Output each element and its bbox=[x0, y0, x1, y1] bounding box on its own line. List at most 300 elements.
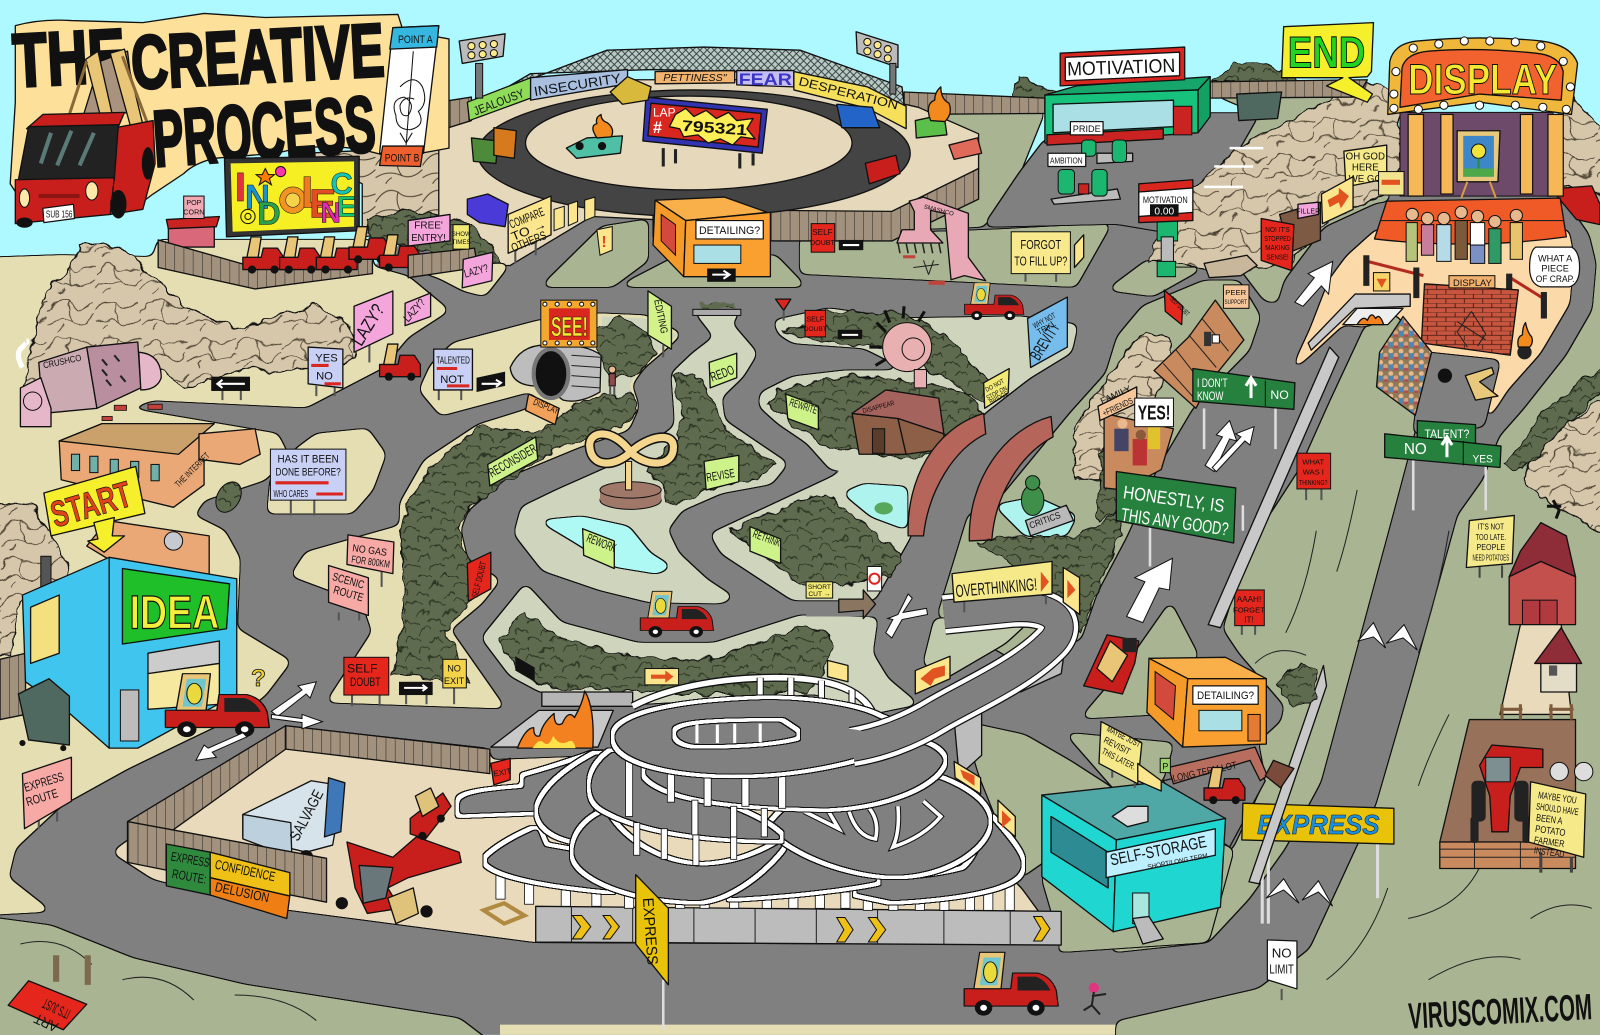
start sign bbox=[44, 466, 145, 552]
island: disappear, ponds, rethink bbox=[710, 308, 1078, 600]
potato late sign: NEED POTATOES bbox=[1472, 553, 1509, 562]
creature: critics goblin: CRITICS bbox=[1028, 510, 1062, 531]
sign: do not stop on bridge: BRIDGE bbox=[988, 390, 1010, 406]
ropes and stanchions bbox=[1363, 255, 1547, 319]
sign: it's just art, upside down: IT'S JUST bbox=[40, 995, 73, 1021]
sign: family and friends bbox=[1098, 383, 1137, 421]
motivation price sign: 0.00 bbox=[1154, 206, 1175, 217]
marquee: DISPLAY bbox=[1408, 56, 1557, 104]
pride sign: PRIDE bbox=[1073, 124, 1101, 134]
front fence of salvage yard bbox=[128, 822, 327, 902]
lower detailing right wall bbox=[1183, 679, 1266, 747]
wrecked car and fire in infield bbox=[566, 114, 622, 158]
barrier and fire pit bbox=[1308, 294, 1410, 350]
fence: top background bbox=[904, 80, 1367, 114]
truck wheels bbox=[16, 147, 154, 228]
dumpster by gas station bbox=[1237, 92, 1282, 121]
sign: editing: EDITING bbox=[651, 298, 669, 335]
sign: yes no: NO bbox=[316, 371, 333, 383]
crushco machine: CRUSHCO bbox=[42, 353, 82, 370]
truck by lazy signs bbox=[380, 344, 420, 381]
compare to others sign bbox=[507, 196, 551, 263]
arrow: big up arrow bbox=[1127, 558, 1172, 623]
sign: reconsider: RECONSIDER bbox=[486, 441, 539, 480]
barrier: highway guard upper bbox=[1208, 347, 1339, 628]
sign: yellow arrow right bbox=[645, 669, 679, 685]
truck cargo frame bbox=[69, 49, 151, 133]
lower detailing curtain bbox=[1155, 672, 1176, 720]
indolence billboard bbox=[158, 156, 372, 289]
sign: what was i thinking: THINKING? bbox=[1299, 479, 1328, 487]
sign: overthinking bbox=[952, 561, 1052, 612]
sign: overthinking: OVERTHINKING! bbox=[955, 574, 1038, 601]
free entry sign: ENTRY! bbox=[411, 233, 446, 244]
lap counter billboard: 795321 bbox=[681, 118, 748, 139]
ground: sage by self storage bbox=[963, 722, 1234, 952]
sign: do not stop on bridge: DO NOT bbox=[984, 378, 1006, 394]
storage sign: SHORT/LONG TERM bbox=[1147, 852, 1208, 872]
parking stripes bbox=[1204, 148, 1263, 187]
station front bbox=[1045, 90, 1198, 143]
ground: middle sage strip between roads bbox=[1112, 310, 1429, 952]
idea right wall bbox=[109, 557, 237, 748]
sign: has it been done before bbox=[270, 449, 346, 515]
sign: editing bbox=[648, 291, 671, 357]
sign: short cut: SHORT bbox=[808, 584, 831, 591]
sign: why not try brevity: BREVITY bbox=[1027, 319, 1064, 363]
sign: maybe just revisit bbox=[1099, 722, 1143, 788]
sign: i don't know highway bbox=[1193, 369, 1295, 449]
dark oval track bbox=[478, 90, 910, 216]
big red title truck bbox=[15, 49, 155, 228]
sign: i don't know highway: I DON'T bbox=[1197, 376, 1228, 390]
top detailing arrow sign bbox=[707, 269, 736, 282]
arena wall bbox=[653, 169, 979, 241]
small display sign bbox=[1449, 276, 1495, 288]
sign: express route pink: ROUTE bbox=[24, 786, 60, 809]
sign: small yellow by overpass bbox=[828, 660, 848, 682]
hills: display rock face bbox=[1148, 82, 1400, 268]
sign: express route pink bbox=[22, 757, 71, 829]
sign: scenic route: ROUTE bbox=[332, 584, 365, 604]
sign: rework bbox=[583, 529, 619, 569]
sign: self doubt track: DOUBT bbox=[810, 239, 836, 247]
detailing shop top bbox=[653, 197, 770, 282]
sign: peer support bbox=[1223, 285, 1249, 308]
area inside top ramp loop bbox=[923, 619, 1032, 679]
island: see tunnel sage side bbox=[602, 316, 678, 404]
sign: end: END bbox=[1288, 27, 1365, 78]
sign: revise bbox=[704, 455, 739, 490]
sign: arrow island bbox=[838, 330, 862, 339]
station roof bbox=[1045, 77, 1210, 95]
storage left wall bbox=[1042, 795, 1116, 932]
sign: maybe just revisit: MAYBE JUST bbox=[1105, 724, 1143, 749]
top detailing window bbox=[694, 245, 741, 263]
crushco machine bbox=[18, 341, 161, 427]
sign: oh god here we go: OH GOD bbox=[1346, 151, 1385, 162]
show times sign: SHOW bbox=[452, 231, 471, 238]
island: has it been done before bbox=[267, 429, 386, 513]
overpass: top ramp bbox=[852, 607, 1059, 747]
sign: do not stop on bridge: STOP ON bbox=[985, 385, 1009, 402]
trees: far right strip bbox=[1505, 362, 1600, 472]
detailing pad bbox=[617, 255, 806, 287]
sign: honestly highway bbox=[1116, 472, 1243, 566]
sign: end bbox=[1282, 23, 1373, 102]
pump islands bbox=[1051, 153, 1133, 204]
storage steps bbox=[1133, 916, 1163, 944]
ground: sage slope under hill bbox=[1107, 260, 1204, 296]
sign: parking: P bbox=[1162, 762, 1168, 772]
sign: express route pink: EXPRESS bbox=[22, 770, 65, 795]
potato farmer sign: INSTEAD bbox=[1533, 845, 1565, 859]
storage vent bbox=[1112, 806, 1148, 827]
bench deck bbox=[1154, 300, 1244, 408]
overpass: top deck bbox=[615, 700, 918, 774]
gas station lot bbox=[984, 113, 1259, 234]
truck bed side bbox=[110, 121, 155, 214]
sign: talented not: TALENTED bbox=[436, 355, 470, 366]
potato farmer sign: MAYBE YOU bbox=[1537, 790, 1577, 806]
free entry sign: FREE' bbox=[414, 221, 443, 232]
salvage yard ground and overpass floor bbox=[112, 727, 1061, 944]
sign: aaah forget it: FORGET bbox=[1233, 605, 1265, 614]
sign: peer support: PEER bbox=[1225, 288, 1247, 297]
arrow: idea exit up right bbox=[271, 682, 316, 716]
sign: self doubt track: SELF bbox=[812, 228, 833, 237]
billboard face bbox=[231, 161, 354, 232]
sign: no limit bbox=[1267, 940, 1297, 1000]
popcorn booth bbox=[166, 196, 219, 247]
storage door bbox=[1133, 893, 1149, 924]
sage wedge by track road bbox=[541, 220, 648, 287]
sign: forgot to fill up: FORGOT bbox=[1020, 237, 1061, 252]
idea building bbox=[18, 521, 237, 751]
inner drive-in fence bbox=[408, 248, 478, 278]
ground: sage island by long term lot bbox=[1065, 733, 1173, 791]
ponds bbox=[843, 484, 1077, 536]
free entry sign bbox=[408, 214, 450, 246]
motivation sign bbox=[1060, 47, 1185, 86]
sign: forgot to fill up bbox=[1011, 232, 1070, 282]
pool bbox=[539, 516, 671, 574]
show times sign bbox=[452, 225, 471, 249]
sign: yes no: YES bbox=[315, 352, 338, 364]
express route sign on fence bbox=[166, 844, 290, 919]
ambition sign: AMBITION bbox=[1050, 156, 1083, 165]
billboard lettering: N bbox=[245, 178, 270, 216]
storage sign: SELF-STORAGE bbox=[1109, 833, 1208, 869]
billboard doodles bbox=[241, 166, 286, 224]
ground: smash machine island bbox=[800, 224, 1111, 287]
sign: has it been done before: WHO CARES bbox=[273, 489, 308, 500]
salvage truck: SALVAGE bbox=[286, 787, 327, 844]
sign: rethink: RETHINK bbox=[751, 528, 782, 550]
spiked roller bbox=[869, 306, 932, 388]
trees: rethink patch bbox=[729, 493, 900, 587]
lamp and rear building bbox=[41, 521, 209, 587]
sign: yes: YES! bbox=[1138, 403, 1170, 425]
hills: rock right of display bbox=[1551, 87, 1600, 194]
overpass: deck lower middle bbox=[728, 847, 881, 897]
arrow: idea exit down left bbox=[196, 733, 247, 760]
station side bbox=[1198, 77, 1210, 133]
sign: forgot to fill up: TO FILL UP? bbox=[1014, 253, 1067, 268]
ground: top sage hill beside arena bbox=[892, 102, 1045, 230]
sign: maybe just revisit: REVISIT bbox=[1102, 735, 1132, 757]
sign: arrow at display steps bbox=[1379, 172, 1404, 195]
point a to point b strip: POINT B bbox=[385, 152, 419, 164]
sign: yield triangle bbox=[776, 299, 791, 321]
arrow: fork right bbox=[1212, 427, 1254, 472]
drive-in cars in front bbox=[243, 227, 420, 274]
ground: bench island bbox=[938, 281, 1260, 663]
sign: rewrite: REWRITE bbox=[788, 397, 819, 417]
arrow: cross junction bbox=[886, 594, 928, 638]
booth: filler: FILLER bbox=[1296, 207, 1320, 215]
sign: black arrow right bbox=[477, 372, 505, 392]
idea sign: IDEA bbox=[130, 587, 219, 639]
storage right wall bbox=[1113, 819, 1226, 932]
sign: talented not bbox=[434, 349, 472, 400]
banner: jealousy: JEALOUSY bbox=[472, 86, 526, 118]
truck plate bbox=[43, 204, 74, 223]
trees: upper roller patch bbox=[784, 310, 990, 403]
title parchment bbox=[10, 13, 449, 214]
overpass: deck lowest right bbox=[854, 816, 1021, 900]
overpass lower supports bbox=[496, 873, 1014, 910]
sign: i don't know highway: NO bbox=[1270, 388, 1289, 402]
display pavilion bbox=[1388, 37, 1578, 198]
sign: no limit: NO bbox=[1272, 945, 1292, 960]
sign: arrow track bbox=[839, 240, 863, 250]
sign: parking bbox=[1160, 758, 1170, 773]
small warning arrow sign bbox=[1373, 273, 1390, 291]
overpass: deck left crescent bbox=[539, 753, 601, 840]
sign: scenic route: SCENIC bbox=[331, 571, 366, 592]
title word: process: PROCESS bbox=[150, 79, 378, 183]
sign: no it's stopped making sense: NO! IT'S bbox=[1265, 225, 1290, 234]
top detailing left wall bbox=[653, 200, 686, 277]
truck front bbox=[15, 178, 114, 224]
person by the tunnel bbox=[609, 366, 616, 395]
storage window bbox=[1051, 816, 1108, 888]
banner: pettiness bbox=[655, 71, 735, 84]
sign: scenic route bbox=[329, 565, 368, 621]
marquee bbox=[1388, 37, 1578, 114]
trees and sage band below rework bbox=[482, 584, 918, 714]
top detailing roof bbox=[655, 197, 767, 221]
potato late sign bbox=[1466, 515, 1514, 578]
overpass: top deck hole bbox=[677, 723, 798, 744]
sign: redo: REDO bbox=[708, 362, 736, 385]
title word: the: THE bbox=[11, 14, 127, 104]
runner figure bbox=[1084, 983, 1106, 1014]
cannonball and debris bbox=[1438, 368, 1498, 400]
ground: sage behind gas station and rocks bbox=[1167, 87, 1390, 303]
sign: no exit: NO bbox=[447, 664, 461, 674]
truck grille bbox=[39, 194, 80, 198]
sign: what was i thinking: WHAT bbox=[1302, 457, 1325, 466]
sign: talented not: NOT bbox=[440, 374, 464, 386]
sign: talent: YES bbox=[1472, 453, 1493, 465]
sign: big orange arrow bbox=[1321, 177, 1353, 224]
point a to point b strip: POINT A bbox=[398, 34, 433, 46]
sign: do not stop on bridge bbox=[984, 369, 1010, 408]
trees: long green band bbox=[393, 393, 636, 684]
ground: far right rock bbox=[1520, 388, 1600, 541]
sign: self doubt track bbox=[810, 224, 836, 252]
ambition sign bbox=[1048, 153, 1086, 166]
compare to others sign: COMPARE bbox=[507, 205, 546, 232]
sign: aaah forget it: AAAH! bbox=[1237, 595, 1261, 604]
trucks bbox=[380, 283, 1139, 1016]
sign: black arrow left bbox=[211, 377, 250, 400]
speech bubble: what a piece of crap: PIECE bbox=[1541, 264, 1569, 274]
sign: black arrow road bbox=[399, 682, 433, 704]
barrier: highway guard lower bbox=[1249, 665, 1327, 884]
trees: rewrite patch bbox=[764, 377, 985, 459]
motivation price sign bbox=[1139, 180, 1193, 277]
road rubble by crushco bbox=[102, 404, 162, 421]
storage sign bbox=[1106, 829, 1215, 878]
sign: has it been done before: DONE BEFORE? bbox=[276, 467, 341, 479]
sign: black arrow diagonal bbox=[515, 656, 535, 682]
detailing shop lower bbox=[1147, 657, 1266, 747]
yellow arrow markers bbox=[554, 197, 612, 255]
sign: rewrite bbox=[786, 394, 819, 430]
banner: desperation bbox=[794, 72, 906, 129]
billboard lettering: L bbox=[301, 166, 328, 217]
sign: exit bbox=[491, 758, 512, 785]
billboard lettering: N bbox=[320, 198, 341, 230]
sign: self doubt large: SELF bbox=[347, 662, 378, 676]
truck climbing to detailing bbox=[1084, 635, 1139, 694]
sign: aaah forget it: IT! bbox=[1244, 616, 1254, 625]
banner: pettiness: PETTINESS" bbox=[663, 73, 727, 84]
lap counter billboard: # bbox=[653, 119, 662, 137]
lower detailing sign: DETAILING? bbox=[1197, 690, 1254, 702]
trees by compare sign bbox=[367, 209, 505, 268]
panel: race track arena bbox=[429, 32, 982, 267]
speech bubble: what a piece of crap: OF CRAP. bbox=[1536, 274, 1574, 284]
long term lot bbox=[1163, 747, 1267, 847]
dumpster bbox=[18, 679, 69, 751]
truck in idea garage foreground bbox=[165, 674, 269, 737]
brick wall bbox=[1421, 284, 1518, 355]
overpass: columns under right lobe bbox=[692, 800, 767, 837]
speech bubble: what a piece of crap bbox=[1530, 247, 1580, 287]
sign: express vertical bbox=[636, 875, 668, 1029]
truck on the bottom road bbox=[964, 952, 1058, 1016]
salvage truck bbox=[243, 778, 345, 864]
sign: why not try brevity: WHY NOT bbox=[1031, 311, 1057, 330]
arrow: to the display road bbox=[1295, 261, 1333, 306]
sign: self doubt diagonal bbox=[1164, 290, 1191, 325]
station door bbox=[1173, 106, 1192, 135]
sign: family and friends: FAMILY bbox=[1099, 383, 1133, 406]
long term lot: LONG TERM LOT bbox=[1172, 760, 1238, 785]
lower detailing door bbox=[1248, 714, 1260, 741]
lap counter billboard bbox=[643, 97, 767, 169]
ground: right sage hills bbox=[1116, 179, 1600, 1035]
sign: maybe just revisit: THIS LATER. bbox=[1100, 746, 1137, 772]
storage roof bbox=[1042, 782, 1226, 840]
wooden frame debris bbox=[484, 903, 524, 924]
sign: express banner bbox=[1242, 803, 1394, 924]
sign: short cut bbox=[806, 582, 833, 598]
billboard lettering: C bbox=[331, 167, 353, 201]
drive-in fence bbox=[158, 240, 372, 289]
ground: fence left of idea building bbox=[0, 653, 26, 720]
overpass: white frames in right deck bbox=[804, 801, 941, 847]
sign: no gas bbox=[347, 535, 394, 587]
sign: yellow turn left lower bbox=[954, 761, 981, 794]
trees by tunnel bbox=[593, 316, 655, 380]
island under lazy sign bbox=[408, 263, 510, 296]
farm path bbox=[1500, 625, 1571, 714]
display stage bbox=[1374, 198, 1566, 244]
station windows bbox=[1053, 100, 1173, 133]
scarecrow bbox=[1547, 500, 1561, 519]
sign: yellow turn left bbox=[915, 656, 950, 694]
red wreck pile bbox=[336, 837, 461, 924]
shrub by detailing bbox=[1276, 663, 1318, 709]
creature: critics goblin bbox=[1021, 476, 1073, 536]
station base bbox=[1047, 129, 1163, 145]
motivation price sign: MOTIVATION bbox=[1143, 195, 1188, 205]
sign: exit: EXIT bbox=[493, 767, 512, 779]
overpass: columns under top deck bbox=[626, 757, 786, 816]
tunnel bbox=[510, 345, 601, 401]
sign: rework: REWORK bbox=[585, 531, 619, 555]
sign: what was i thinking: WAS I bbox=[1303, 468, 1324, 477]
sign: honestly highway: HONESTLY, IS bbox=[1122, 481, 1226, 516]
banner: fear: FEAR bbox=[739, 71, 792, 89]
fuel pumps bbox=[1058, 140, 1127, 196]
overpass: exit ramp bbox=[460, 753, 601, 813]
point a to point b strip bbox=[380, 26, 439, 166]
sign: talent: NO bbox=[1404, 441, 1427, 458]
popcorn booth: POP bbox=[186, 199, 202, 207]
lap counter billboard: LAP bbox=[653, 105, 676, 119]
sign: self doubt diagonal: SELF DOUBT bbox=[1168, 295, 1191, 318]
sign: self doubt island: SELF bbox=[806, 316, 825, 324]
idea window bbox=[31, 595, 59, 663]
red car behind display bbox=[1551, 186, 1600, 225]
potato farmer sign: BEEN A bbox=[1535, 813, 1564, 827]
sign: rethink bbox=[750, 527, 782, 563]
hills: big left rock pile bbox=[22, 241, 357, 398]
potato farmer sign bbox=[1529, 762, 1593, 873]
sign: revise: REVISE bbox=[705, 466, 736, 485]
sign: i don't know highway: KNOW bbox=[1197, 389, 1224, 403]
billboard lettering: D bbox=[257, 195, 281, 232]
billboard frame bbox=[224, 156, 359, 237]
sign: no left turn bbox=[867, 566, 882, 591]
floodlight right bbox=[856, 32, 898, 94]
billboard lettering: E bbox=[337, 191, 356, 223]
ground: bottom tan strip bbox=[500, 1025, 1138, 1035]
pit road below the wall bbox=[1413, 352, 1500, 434]
sign: exclamation: ! bbox=[602, 234, 607, 251]
smash machine bbox=[897, 197, 986, 285]
sign: wooden short cut arrow bbox=[839, 590, 876, 619]
lower detailing window bbox=[1199, 710, 1242, 731]
express route sign on fence: CONFIDENCE bbox=[214, 857, 277, 884]
cabin: disappear: DISAPPEAR bbox=[862, 399, 895, 415]
